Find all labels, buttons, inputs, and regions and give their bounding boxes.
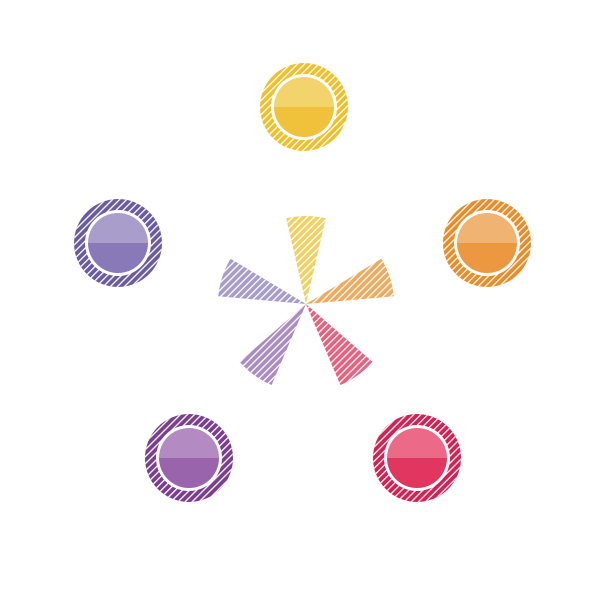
icon: blue-purple circle [74,199,162,287]
icon: red circle [373,414,461,502]
icon: purple circle [145,414,233,502]
icon: orange circle [443,199,531,287]
icon: yellow circle [260,63,348,151]
chart: central star of wedges [218,216,394,385]
